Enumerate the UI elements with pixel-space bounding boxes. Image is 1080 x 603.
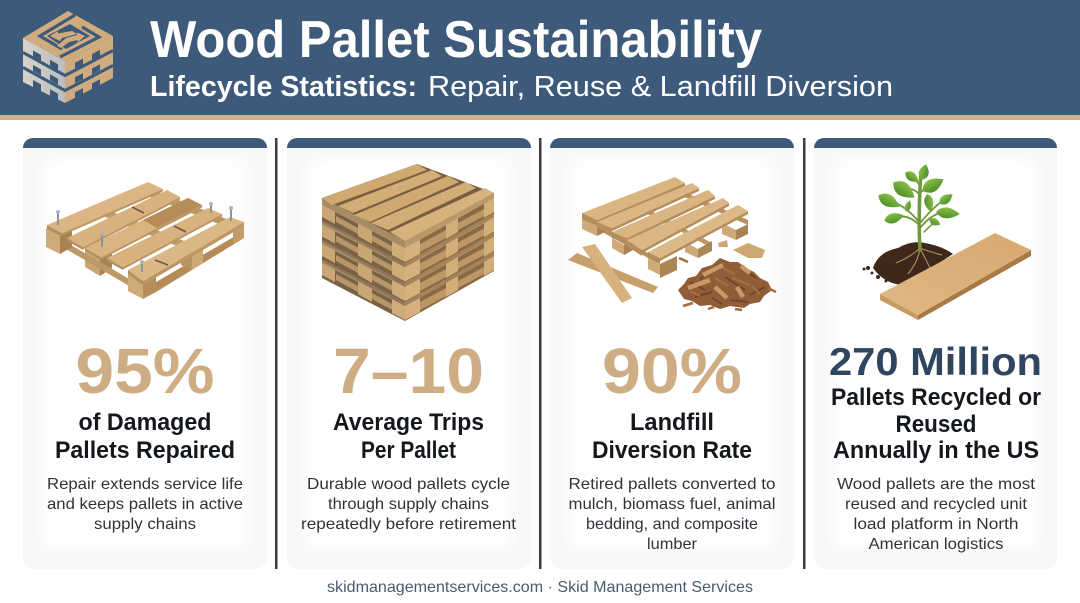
description: mulch, biomass fuel, animal bbox=[568, 496, 776, 513]
description: bedding, and composite bbox=[586, 516, 758, 533]
heading: of Damaged bbox=[78, 409, 212, 436]
description bbox=[837, 476, 1036, 553]
heading: Pallets Recycled or bbox=[831, 384, 1041, 411]
icon: pallet cube logo bbox=[23, 11, 113, 103]
panel: pallets recycled bbox=[814, 138, 1057, 569]
description bbox=[301, 476, 517, 533]
description bbox=[568, 476, 776, 553]
subtitle bbox=[150, 71, 893, 103]
heading bbox=[592, 409, 752, 464]
heading: Diversion Rate bbox=[592, 437, 752, 464]
panel: repair bbox=[23, 138, 267, 569]
description: Wood pallets are the most bbox=[837, 476, 1036, 493]
sapling stem and leaves bbox=[876, 163, 960, 250]
heading: Reused bbox=[896, 411, 976, 438]
statistic: 270 Million: 270 Million bbox=[829, 341, 1042, 384]
description: supply chains bbox=[94, 516, 196, 533]
description: repeatedly before retirement bbox=[301, 516, 517, 533]
statistic: 95%: 95% bbox=[76, 335, 214, 407]
description: through supply chains bbox=[328, 496, 489, 513]
heading: Pallets Repaired bbox=[55, 437, 235, 464]
illustration: broken pallet, planks and mulch bbox=[568, 177, 776, 310]
subtitle: Lifecycle Statistics: bbox=[150, 71, 417, 103]
statistic: 90%: 90% bbox=[602, 335, 742, 407]
description: and keeps pallets in active bbox=[47, 496, 243, 513]
wood chip pile bbox=[678, 258, 776, 310]
fragments bbox=[718, 240, 765, 258]
panel: trips bbox=[287, 138, 531, 569]
heading: Per Pallet bbox=[361, 437, 456, 464]
description: lumber bbox=[647, 536, 698, 553]
heading bbox=[333, 409, 484, 464]
illustration: pallet with nails bbox=[46, 182, 244, 299]
description: load platform in North bbox=[854, 516, 1018, 533]
heading: Landfill bbox=[630, 409, 714, 436]
title: Wood Pallet Sustainability bbox=[150, 11, 762, 69]
panel: landfill diversion bbox=[550, 138, 794, 569]
footer: skidmanagementservices.com · Skid Management Services bbox=[327, 579, 753, 596]
heading bbox=[831, 384, 1041, 464]
lumber plank bbox=[880, 233, 1031, 320]
header banner bbox=[0, 0, 1080, 120]
statistic: 7–10: 7–10 bbox=[333, 335, 484, 407]
subtitle: Repair, Reuse & Landfill Diversion bbox=[428, 71, 893, 103]
description: American logistics bbox=[868, 536, 1004, 553]
soil mound bbox=[862, 242, 953, 285]
description: Retired pallets converted to bbox=[568, 476, 776, 493]
illustration: stacked pallets bbox=[322, 164, 494, 321]
heading: Average Trips bbox=[333, 409, 484, 436]
description: reused and recycled unit bbox=[845, 496, 1028, 513]
loose planks bbox=[568, 244, 658, 303]
heading bbox=[55, 409, 235, 464]
description: Durable wood pallets cycle bbox=[307, 476, 510, 493]
description: Repair extends service life bbox=[47, 476, 243, 493]
heading: Annually in the US bbox=[833, 437, 1039, 464]
description bbox=[47, 476, 243, 533]
illustration: sapling and lumber plank bbox=[862, 163, 1031, 320]
